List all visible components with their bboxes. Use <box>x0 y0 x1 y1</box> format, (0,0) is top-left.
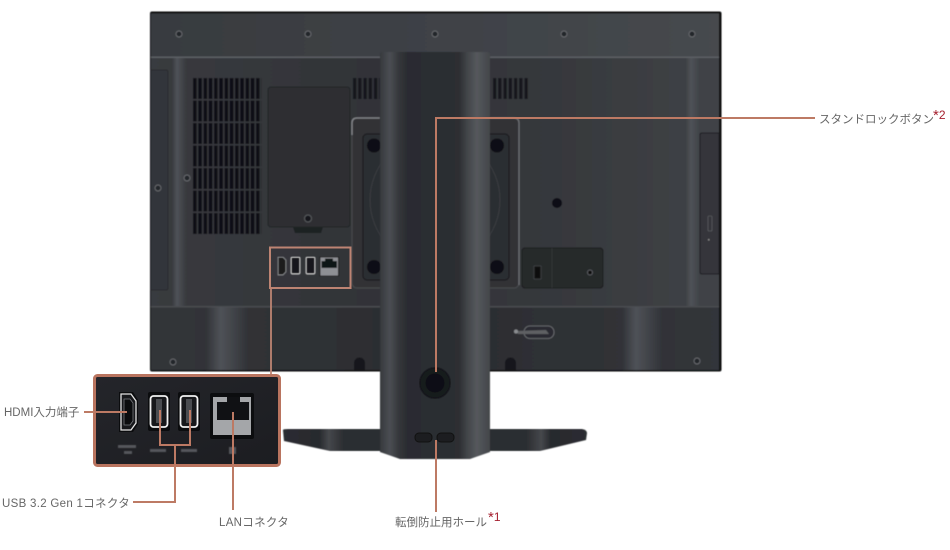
VESA bracket <box>352 118 519 288</box>
label: HDMI: HDMI入力端子 <box>4 405 79 419</box>
label: LAN: LANコネクタ <box>219 516 289 529</box>
port markings <box>118 445 236 454</box>
stand column <box>380 52 490 459</box>
left vent <box>193 78 262 234</box>
stand base <box>283 429 587 451</box>
keyhole latch <box>514 326 554 338</box>
left side panel <box>151 70 168 290</box>
note marker 1: 1 <box>494 510 501 524</box>
label: USB: USB 3.2 Gen 1コネクタ <box>2 497 130 510</box>
monitor back <box>150 12 722 372</box>
anti-tip holes <box>415 433 454 442</box>
switch panel <box>522 248 603 288</box>
line: USB <box>133 410 190 502</box>
leader lines <box>84 118 815 512</box>
right side panel <box>700 133 719 274</box>
inset port panel <box>94 376 280 466</box>
icon: HDMI port <box>119 392 138 432</box>
rear cover <box>151 57 719 307</box>
small vents <box>353 78 528 99</box>
monitor screws <box>155 31 700 365</box>
icon: LAN port <box>210 393 254 439</box>
top bezel <box>151 14 719 58</box>
line: anti-tip hole <box>435 440 437 512</box>
lower notches <box>354 358 516 370</box>
lower cover <box>151 306 719 370</box>
line: LAN <box>232 412 234 510</box>
port callout box <box>270 248 350 288</box>
icon: USB port 2 <box>178 392 200 431</box>
label: anti-tip hole: 転倒防止用ホール <box>395 515 487 529</box>
screw hole <box>552 198 562 208</box>
stand lock button <box>420 368 450 398</box>
port connector line <box>270 288 272 375</box>
note marker 2: 2 <box>939 108 946 122</box>
line: HDMI <box>84 411 127 413</box>
icon: USB port 1 <box>148 392 170 431</box>
label: stand lock button: スタンドロックボタン <box>819 113 934 126</box>
small port group <box>278 257 338 276</box>
note marker 1: * <box>488 509 494 526</box>
access door <box>268 87 350 233</box>
line: stand lock button <box>436 118 815 372</box>
note marker 2: * <box>933 107 939 124</box>
